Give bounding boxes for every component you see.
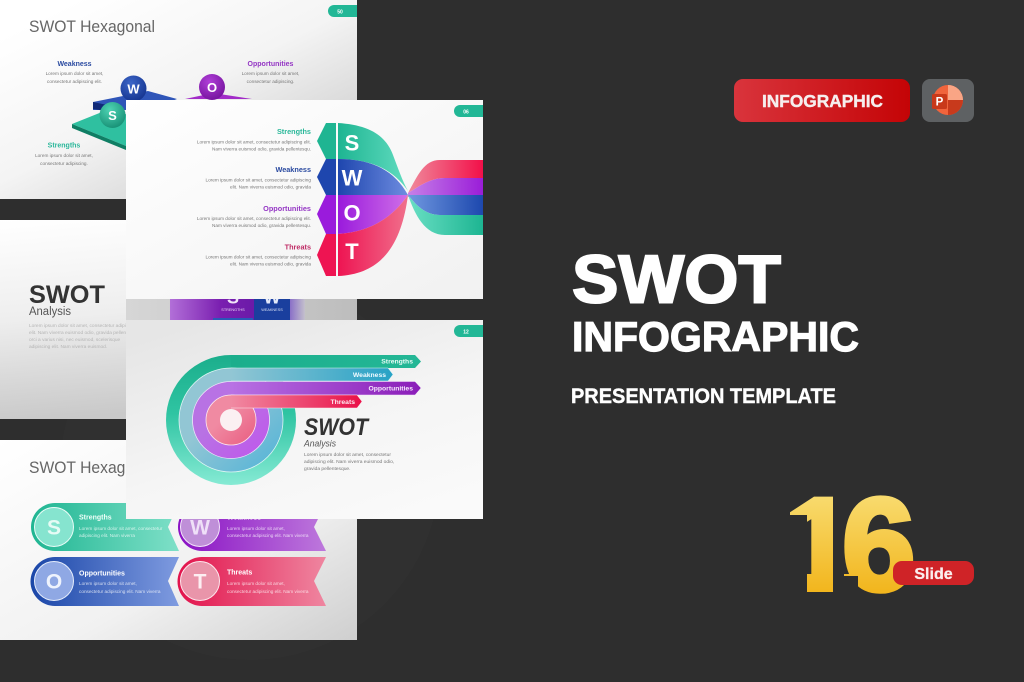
body text: adipiscing elit. Nam viverra euismod. — [29, 344, 107, 350]
ribbon: Strengths: Lorem ipsum dolor sit amet, consectetur — [79, 526, 163, 531]
funnel: S W O T segments: O — [343, 200, 361, 226]
icon: PowerPoint — [922, 79, 974, 122]
page tab 50 — [328, 5, 357, 17]
ribbon: Weakness: Weakness — [227, 514, 261, 522]
text: Opportunities: Lorem ipsum dolor sit amet, consectetur adipiscing elit. — [197, 216, 311, 221]
ring and bar: Opportunities — [192, 382, 421, 458]
body text: Lorem ipsum dolor sit amet, consectetur — [304, 452, 391, 458]
subtitle: PRESENTATION TEMPLATE: PRESENTATION TEMPLATE — [571, 385, 836, 408]
hexagon 3D plates with spheres: S — [108, 108, 117, 123]
panel: SWOT Analysis slide (middle left) — [0, 220, 357, 419]
label: Weakness: consectetur adipiscing elit. — [47, 79, 102, 84]
badge: Slide — [893, 561, 974, 585]
title: SWOT: SWOT — [572, 242, 781, 318]
funnel: S W O T segments: S — [345, 130, 359, 156]
ribbon: Strengths — [31, 503, 179, 551]
label: Opportunities — [242, 61, 299, 84]
text: Threats: Lorem ipsum dolor sit amet, consectetur adipiscing — [205, 254, 311, 260]
text: Strengths: Lorem ipsum dolor sit amet, consectetur adipiscing elit. — [197, 140, 311, 144]
ribbon: Opportunities: Lorem ipsum dolor sit amet, — [79, 581, 137, 586]
ribbon: Threats: Threats — [227, 570, 252, 576]
page tab 06: 06 — [463, 110, 469, 116]
heading: SWOT Analysis: Analysis — [303, 438, 336, 450]
funnel: output ribbons — [408, 160, 483, 235]
label: Strengths: Strengths — [48, 142, 80, 150]
page tab 12: 12 — [463, 330, 469, 336]
ring and bar: Strengths — [166, 355, 421, 485]
ribbon: Weakness: Lorem ipsum dolor sit amet, — [227, 526, 285, 531]
icon: PowerPoint: P — [936, 96, 944, 108]
peek of hidden slide content: STRENGTHS — [221, 308, 245, 312]
body text — [29, 323, 126, 350]
ribbon: Threats: consectetur adipiscing elit. Nam viverra — [227, 589, 309, 594]
ribbon: Strengths: Strengths — [79, 514, 112, 522]
text: Threats — [205, 242, 311, 266]
ring and bar: Strengths: Strengths — [381, 358, 413, 366]
label: Opportunities: Opportunities — [248, 61, 294, 68]
ring centre — [220, 409, 242, 431]
ribbon: Weakness — [178, 503, 326, 551]
text: Threats: Threats — [285, 242, 311, 252]
body text: elit. Nam viverra euismod odio, gravida pellen — [29, 330, 126, 336]
text: Strengths: Strengths — [277, 127, 311, 136]
heading: SWOT Analysis — [304, 418, 370, 448]
text: Weakness: Lorem ipsum dolor sit amet, consectetur adipiscing — [205, 178, 311, 182]
hexagon 3D plates with spheres — [72, 74, 252, 150]
ribbon: Threats — [178, 557, 326, 606]
ribbon: Strengths: S — [47, 516, 61, 540]
ring and bar: Threats — [206, 395, 362, 445]
text: Threats: elit. Nam viverra euismod odio, gravida — [230, 262, 311, 266]
ribbon: Opportunities: Opportunities — [79, 570, 125, 578]
funnel: S W O T segments: W — [342, 166, 363, 190]
label: Opportunities: Lorem ipsum dolor sit amet, — [242, 71, 299, 76]
label: Weakness: Lorem ipsum dolor sit amet, — [46, 71, 103, 76]
heading: SWOT Analysis: SWOT — [304, 414, 370, 441]
title: SWOT Hexagonal: SWOT Hexagonal — [29, 459, 155, 477]
text: Strengths — [197, 127, 311, 152]
peek of hidden slide content: WEAKNESS — [261, 308, 283, 312]
ribbon: Threats: T — [194, 570, 207, 594]
label: Strengths — [35, 142, 93, 166]
page tab 50: 50 — [337, 10, 343, 16]
label: Weakness — [46, 61, 103, 84]
page tab 12 — [454, 325, 483, 337]
panel: SWOT funnel slide (centre top) — [126, 100, 483, 299]
ring and bar: Weakness — [179, 368, 393, 472]
text: Weakness — [205, 165, 311, 190]
number: 16: 16 — [783, 471, 915, 618]
label: Strengths: Lorem ipsum dolor sit amet, — [35, 153, 93, 158]
ribbon: Strengths: adipiscing elit. Nam viverra — [79, 533, 135, 538]
title: INFOGRAPHIC: INFOGRAPHIC — [572, 313, 859, 360]
text: Weakness: Weakness — [275, 165, 311, 174]
peek of hidden slide content: S — [227, 288, 239, 308]
text: Strengths: Nam viverra euismod odio, gravida pellentesqu. — [212, 146, 311, 152]
body text: adipiscing elit. Nam viverra euismod odio, — [304, 459, 394, 465]
ribbon: Opportunities: O — [46, 570, 62, 594]
badge: INFOGRAPHIC: INFOGRAPHIC — [762, 91, 883, 111]
panel: SWOT Hexagonal ribbons slide (bottom left) — [0, 440, 357, 640]
body text: orci a varius nisi, nec euismod, scelerisque — [29, 337, 121, 343]
funnel: S W O T segments: T — [345, 239, 359, 264]
title: SWOT Hexagonal: SWOT Hexagonal — [29, 18, 155, 36]
ring and bar: Opportunities: Opportunities — [368, 386, 413, 392]
ribbon: Weakness: W — [190, 516, 210, 540]
ribbon: Threats: Lorem ipsum dolor sit amet, — [227, 581, 285, 586]
peek of hidden slide content — [126, 288, 357, 320]
ring and bar: Weakness: Weakness — [353, 372, 386, 379]
body text: gravida pellentesque. — [304, 466, 350, 472]
panel: SWOT Hexagonal slide (top left) — [0, 0, 357, 199]
page tab 06 — [454, 105, 483, 117]
text: Opportunities: Nam viverra euismod odio, gravida pellentesqu. — [212, 223, 311, 228]
label: Weakness: Weakness — [57, 61, 92, 68]
body text — [304, 452, 394, 472]
badge: INFOGRAPHIC — [734, 79, 910, 122]
ribbon: Opportunities — [30, 557, 179, 606]
panel: SWOT Analysis spiral slide (centre bottom) — [126, 320, 483, 519]
hexagon 3D plates with spheres: W — [127, 82, 140, 96]
heading: SWOT Analysis: SWOT — [29, 281, 105, 309]
label: Strengths: consectetur adipiscing. — [40, 161, 88, 166]
ribbon: Opportunities: consectetur adipiscing elit. Nam viverra — [79, 589, 161, 594]
text: Weakness: elit. Nam viverra euismod odio, gravida — [230, 184, 311, 190]
ribbon: Weakness: consectetur adipiscing elit. Nam viverra — [227, 533, 309, 538]
heading: SWOT Analysis: Analysis — [29, 306, 71, 318]
text: Opportunities: Opportunities — [263, 204, 311, 213]
text: Opportunities — [197, 204, 311, 228]
funnel: S W O T segments — [317, 123, 408, 276]
peek of hidden slide content: W — [264, 288, 280, 308]
ring and bar: Threats: Threats — [330, 399, 355, 406]
body text: Lorem ipsum dolor sit amet, consectetur adipi — [29, 323, 126, 329]
hexagon 3D plates with spheres: O — [207, 80, 217, 95]
label: Opportunities: consectetur adipiscing. — [247, 79, 294, 84]
badge: Slide: Slide — [914, 566, 953, 583]
